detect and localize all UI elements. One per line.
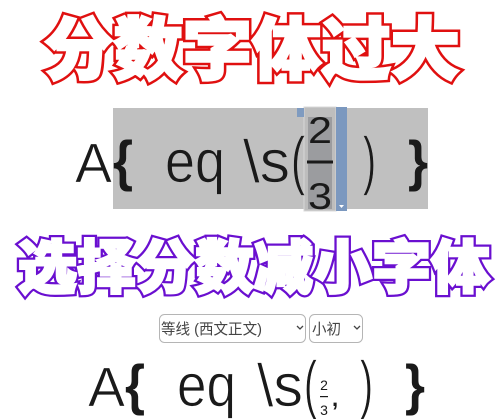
heading: 选择分数减小字体: 选择分数减小字体 [18, 236, 490, 301]
formula text [75, 124, 428, 196]
font family dropdown: 等线 (西文正文) [161, 320, 262, 338]
large fraction 2/3: 2 [308, 110, 332, 151]
title: 分数字体过大: 分数字体过大 [44, 13, 460, 89]
formula with reduced fraction: ) [360, 348, 373, 419]
fraction highlight [308, 117, 332, 209]
font size dropdown: 小初 [312, 321, 341, 338]
formula with reduced fraction: } [405, 353, 425, 416]
formula text: \s [243, 128, 290, 195]
formula with reduced fraction [88, 348, 425, 419]
font size dropdown [310, 314, 362, 342]
small fraction 2/3 [320, 377, 328, 418]
resize handle [297, 108, 304, 117]
font family dropdown [160, 314, 306, 342]
formula with reduced fraction: ( [304, 348, 317, 419]
formula text: ) [363, 124, 376, 196]
comma: , [332, 386, 338, 411]
formula text: ( [291, 124, 305, 196]
formula text: A [75, 131, 113, 194]
small fraction 2/3: 2 [320, 377, 328, 393]
large fraction 2/3 [307, 110, 333, 217]
blue scrollbar [336, 107, 347, 211]
formula text: { [113, 129, 133, 192]
heading: 选择分数减小字体: 选择分数减小字体 [18, 236, 490, 301]
dropdown arrow [339, 205, 344, 208]
formula with reduced fraction: A [88, 355, 126, 418]
large fraction 2/3: 3 [308, 176, 332, 217]
formula with reduced fraction: { [125, 353, 145, 416]
formula text: eq [165, 128, 225, 195]
panel: selected field code with large fraction [75, 107, 428, 217]
formula with reduced fraction: eq [177, 352, 236, 419]
small fraction 2/3: 3 [320, 402, 328, 418]
fraction selection box [304, 107, 336, 211]
formula with reduced fraction: \s [257, 352, 303, 419]
formula text: } [408, 129, 428, 192]
title: 分数字体过大: 分数字体过大 [44, 13, 460, 89]
selection background [113, 108, 428, 209]
